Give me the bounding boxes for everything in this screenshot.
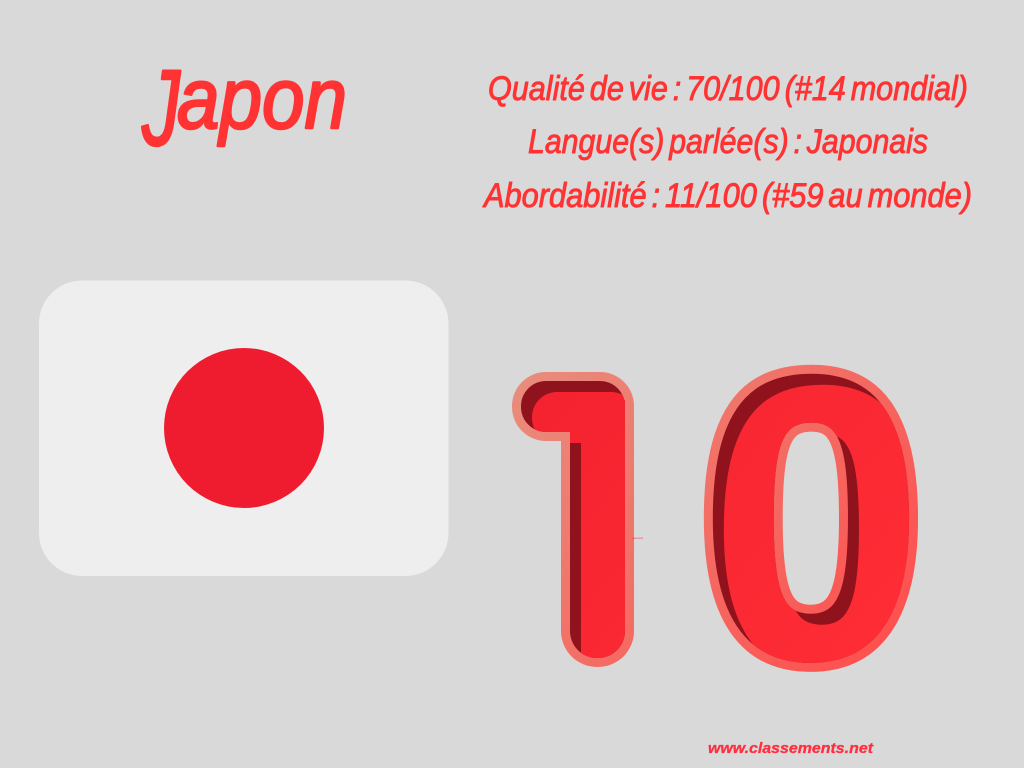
- title: apon: [177, 51, 347, 147]
- website footer: www.classements.net: [708, 740, 874, 757]
- rank number 0: [704, 364, 918, 672]
- quality of life: Qualité de vie : 70/100 (#14 mondial): [488, 70, 968, 108]
- tiny caption: classements: [632, 537, 644, 540]
- facts text block: [482, 70, 972, 215]
- languages: Langue(s) parlée(s) : Japonais: [528, 123, 928, 161]
- rank number 0: 0: [700, 294, 922, 741]
- affordability: Abordabilité : 11/100 (#59 au monde): [482, 177, 972, 215]
- icon: flag of Japan: [39, 280, 448, 576]
- rank number 0: 0: [700, 294, 922, 741]
- rank number 1: 1: [486, 364, 693, 703]
- rank number 0: 0: [711, 305, 933, 752]
- rank number 1: [512, 372, 634, 667]
- rank number 1: 1: [497, 375, 704, 714]
- title: J: [141, 47, 181, 168]
- rank number 1: 1: [486, 364, 693, 703]
